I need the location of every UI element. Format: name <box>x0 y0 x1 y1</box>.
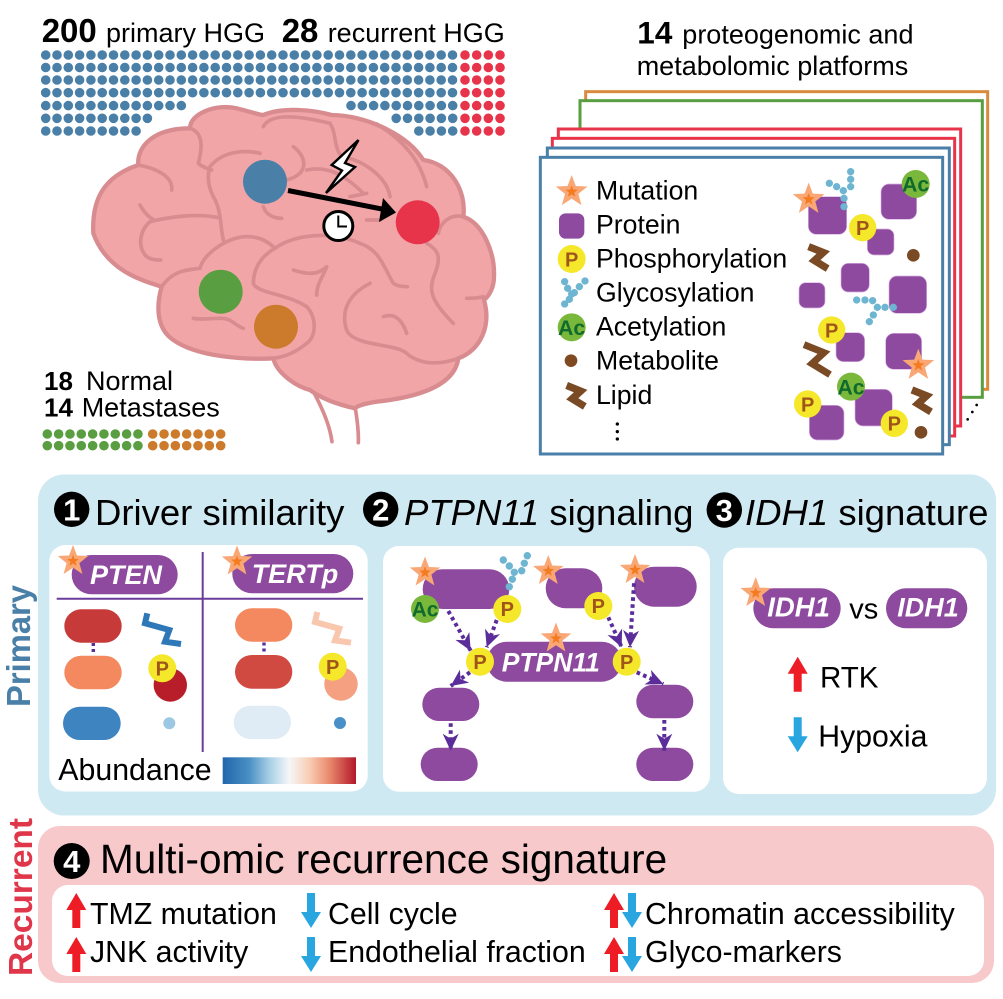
signaling proteins <box>421 567 697 781</box>
molecule scatter: Ac <box>837 375 865 399</box>
abundance colour bar <box>223 757 356 784</box>
molecule scatter <box>793 170 934 440</box>
heading: platforms: proteogenomic and <box>682 19 913 49</box>
legend labels: Phosphorylation <box>596 243 787 273</box>
subpanel: PTPN11 signaling <box>383 546 710 792</box>
labels: chromatin and glyco-markers <box>645 898 956 969</box>
sample site: recurrent tumor <box>396 200 440 244</box>
molecule legend ellipsis <box>616 422 619 441</box>
sample site: primary tumor <box>243 160 287 204</box>
icon: lightning bolt <box>326 140 358 193</box>
wild-type IDH1 pill <box>886 588 967 628</box>
sample site: metastasis <box>254 305 298 349</box>
divider lines <box>57 552 363 752</box>
TERTp column phosphoprotein <box>319 653 358 701</box>
dot grid: metastasis samples <box>153 434 221 446</box>
legend icon: metabolite <box>565 354 577 367</box>
molecule scatter: P <box>888 414 901 436</box>
legend icon: lipid <box>567 385 585 406</box>
title 3: IDH1 signature: 3 <box>716 493 733 528</box>
PTEN column phosphoprotein <box>148 654 187 702</box>
title 1: driver similarity: Driver similarity <box>95 492 345 533</box>
legend icon: phosphorylation: P <box>565 249 578 271</box>
title 2: PTPN11 signaling: 2 <box>372 492 389 528</box>
brain stem nerves <box>313 392 358 443</box>
PTPN11 pill: PTPN11 <box>502 648 600 678</box>
hypoxia label: Hypoxia <box>818 721 928 754</box>
subpanel: driver similarity <box>49 545 368 792</box>
heading: primary and recurrent counts: recurrent HGG <box>328 18 505 48</box>
labels: chromatin and glyco-markers: Glyco-markers <box>645 936 842 969</box>
heading: primary and recurrent counts: 200 <box>42 12 97 49</box>
TERTp pill <box>232 554 353 593</box>
TERTp column lipid <box>315 612 351 643</box>
sample site: normal <box>199 270 243 314</box>
legend labels: Glycosylation <box>596 277 755 307</box>
label: normal and metastases counts: 14 <box>44 393 73 423</box>
acetylation badge: Ac <box>412 598 439 622</box>
legend labels: Protein <box>596 209 680 239</box>
dot grid: normal samples <box>47 434 138 446</box>
side label: recurrent: Recurrent <box>3 818 40 976</box>
heading: platforms: metabolomic platforms <box>637 51 908 81</box>
heading: primary and recurrent counts: primary HGG <box>106 18 265 48</box>
dot grid: 28 recurrent samples <box>465 55 500 131</box>
heading: platforms: 14 <box>637 14 673 50</box>
phosphorylation badges: P <box>501 599 514 621</box>
up arrow: RTK <box>788 657 808 692</box>
labels: chromatin and glyco-markers: Chromatin accessibility <box>645 898 956 931</box>
wild-type IDH1 pill: IDH1 <box>897 593 959 623</box>
labels: TMZ and JNK: TMZ mutation <box>90 898 277 931</box>
phosphorylation badges <box>466 592 641 676</box>
molecule scatter: P <box>801 394 814 416</box>
legend labels <box>596 175 787 410</box>
legend labels: Mutation <box>596 175 698 205</box>
dotted signaling arrows <box>448 583 664 751</box>
vs label: vs <box>849 593 878 625</box>
PTEN column metabolite <box>163 717 175 729</box>
labels: cell cycle and endothelial fraction: Endothelial fraction <box>328 936 586 969</box>
title 2: PTPN11 signaling: PTPN11 signaling <box>404 492 693 533</box>
PTPN11 pill <box>487 642 622 682</box>
legend icon: glycosylation <box>565 281 585 304</box>
heading: primary and recurrent counts: 28 <box>282 12 318 49</box>
brain illustration <box>93 107 494 443</box>
legend labels: Lipid <box>596 380 652 410</box>
PTEN pill <box>72 555 178 594</box>
glycan on first protein <box>503 556 527 587</box>
arrows: up <box>66 893 86 972</box>
legend labels: Acetylation <box>596 312 726 342</box>
title 1: driver similarity: 1 <box>63 492 80 528</box>
molecule scatter: Ac <box>902 173 929 197</box>
legend icon: protein <box>559 213 584 239</box>
panel: recurrent <box>38 826 994 983</box>
icon: clock <box>324 212 353 240</box>
side label: primary: Primary <box>1 585 38 707</box>
star on PTEN <box>58 545 88 574</box>
star on TERTp <box>222 546 252 574</box>
phosphorylation badges: P <box>592 596 605 618</box>
labels: cell cycle and endothelial fraction: Cell cycle <box>328 898 458 931</box>
ellipsis between cards <box>966 404 978 421</box>
brain outline <box>93 107 494 408</box>
PTEN pill: PTEN <box>90 560 163 590</box>
phosphorylation badges: P <box>473 652 487 674</box>
labels: TMZ and JNK: JNK activity <box>90 936 249 969</box>
legend icon: mutation <box>556 175 588 205</box>
abundance legend label: Abundance <box>58 754 212 787</box>
molecule scatter: P <box>825 320 838 342</box>
labels: TMZ and JNK <box>90 898 277 969</box>
TERTp column abundance proteins <box>234 608 292 739</box>
arrows: down <box>301 893 321 972</box>
title 3: IDH1 signature: IDH1 signature <box>745 492 988 533</box>
title 4: multi-omic recurrence signature: Multi-omic recurrence signature <box>100 836 667 882</box>
TERTp column phosphoprotein: P <box>326 657 339 679</box>
arrows: up and down <box>604 893 642 972</box>
mutant IDH1 pill: IDH1 <box>767 592 830 623</box>
phosphorylation badges: P <box>620 652 633 674</box>
label: normal and metastases counts: Normal <box>86 366 173 396</box>
panel: primary <box>38 474 996 816</box>
legend labels: Metabolite <box>596 345 719 375</box>
star on IDH1 <box>740 577 771 606</box>
white result box <box>52 885 984 976</box>
TERTp column metabolite <box>334 717 346 729</box>
arrow: primary to recurrent <box>288 190 396 222</box>
mutation stars <box>410 554 650 651</box>
TERTp pill: TERTp <box>252 559 338 589</box>
label: normal and metastases counts: 18 <box>44 366 73 396</box>
RTK label: RTK <box>820 661 879 694</box>
subpanel: IDH1 signature <box>723 548 987 794</box>
dot grid: 200 primary samples <box>46 55 453 131</box>
PTEN column abundance proteins <box>63 609 122 740</box>
legend icon: phosphorylation <box>558 245 586 273</box>
PTEN column lipid <box>145 613 181 644</box>
title 4: multi-omic recurrence signature: 4 <box>63 844 81 879</box>
labels: cell cycle and endothelial fraction <box>328 898 586 969</box>
legend icon: acetylation: Ac <box>558 316 585 340</box>
label: normal and metastases counts: Metastases <box>82 393 220 423</box>
brain sulci <box>138 117 483 363</box>
down arrow: hypoxia <box>788 717 808 752</box>
platform card stack <box>540 92 988 454</box>
PTEN column phosphoprotein: P <box>156 658 169 680</box>
molecule scatter: P <box>856 218 869 240</box>
mutant IDH1 pill <box>753 588 841 628</box>
